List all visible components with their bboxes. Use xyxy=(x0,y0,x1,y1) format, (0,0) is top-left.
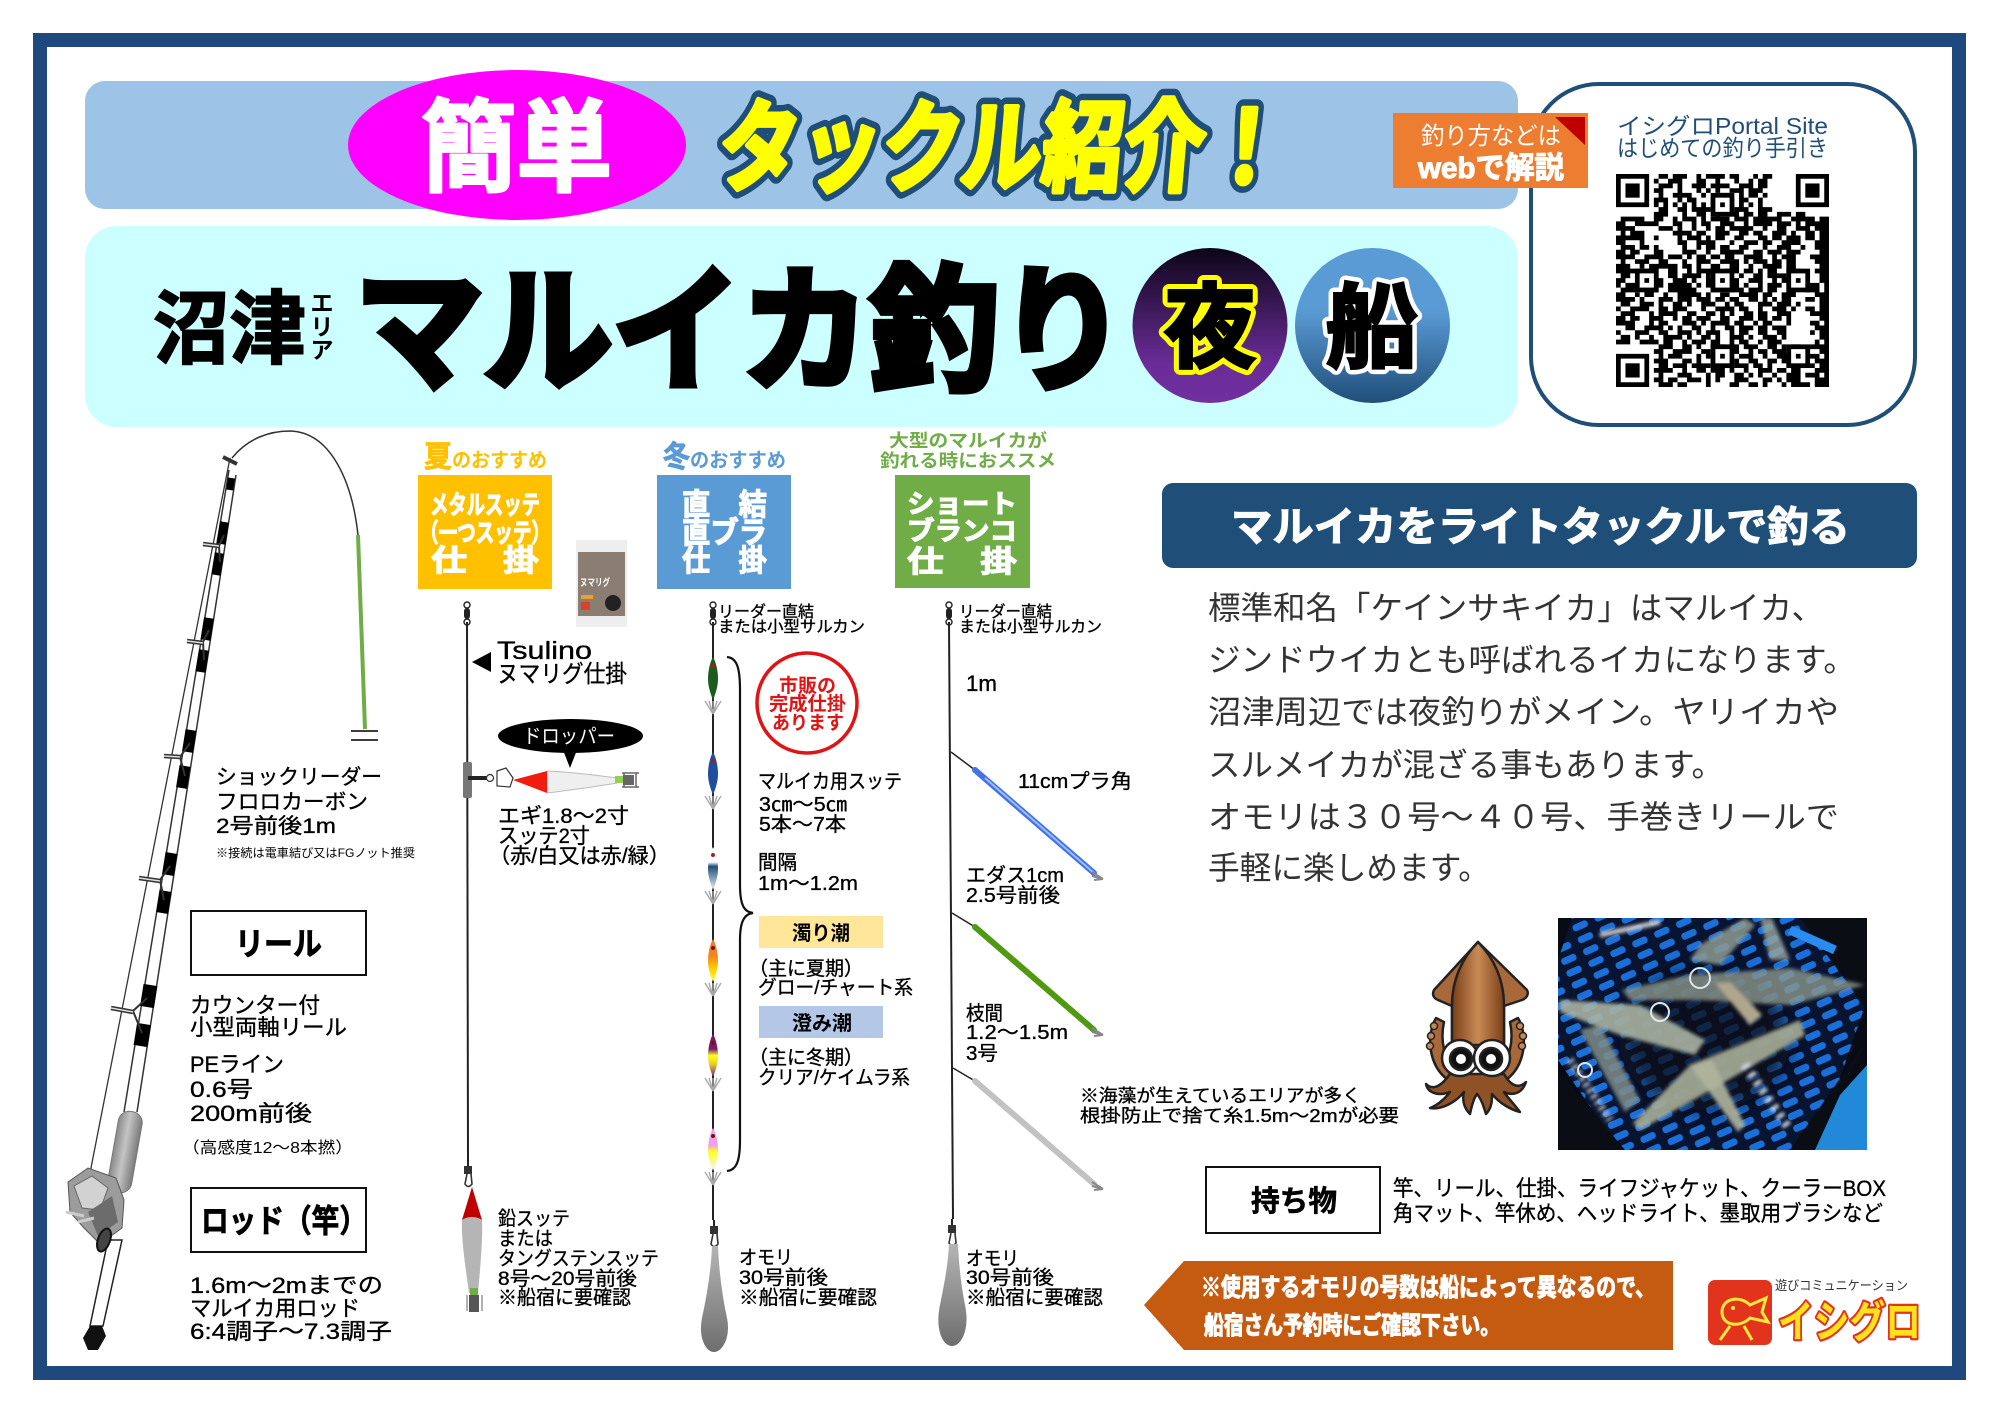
short branch rig title box: ブランコ xyxy=(907,516,1017,546)
swivel note: または小型サルカン xyxy=(718,618,865,636)
winter rig title box: 仕 掛 xyxy=(682,545,767,578)
summer rig title box: メタルスッテ xyxy=(430,490,540,520)
sinker text: ※船宿に要確認 xyxy=(966,1287,1103,1309)
shock leader text: ※接続は電車結び又はFGノット推奨 xyxy=(216,845,415,860)
product name: Tsulino xyxy=(497,637,592,665)
QR caption xyxy=(1617,113,1828,161)
description text block: 沼津周辺では夜釣りがメイン。ヤリイカや xyxy=(1208,694,1839,730)
egi text xyxy=(489,805,670,868)
main line with swivel xyxy=(710,602,716,1220)
rod tip guide xyxy=(223,457,237,464)
area label vertical: リ xyxy=(310,314,334,340)
winter rig title box: 直 結 xyxy=(682,489,767,522)
brace xyxy=(727,657,753,1171)
description text block: スルメイカが混ざる事もあります。 xyxy=(1208,747,1724,783)
rod specs text xyxy=(190,1273,392,1344)
winter heading: のおすすめ xyxy=(690,449,786,472)
fins and mantle xyxy=(1433,942,1528,1050)
logo mark xyxy=(1708,1280,1772,1345)
reel specs text: カウンター付 xyxy=(190,993,320,1018)
winter heading xyxy=(663,441,786,474)
rod label xyxy=(191,1188,367,1252)
place name: 沼津 xyxy=(153,285,306,374)
arrow marker xyxy=(472,652,491,672)
product name: ヌマリグ仕掛 xyxy=(497,661,627,688)
dropper callout: ドロッパー xyxy=(523,726,615,748)
column: winter rig xyxy=(657,441,913,1352)
sutte specs text: 5本～7本 xyxy=(759,813,846,836)
right section heading xyxy=(1162,483,1917,568)
right section heading: マルイカをライトタックルで釣る xyxy=(1231,504,1850,550)
reel specs text: 小型両軸リール xyxy=(190,1015,347,1040)
dark rim xyxy=(1598,920,1867,1150)
branch specs text: 2.5号前後 xyxy=(966,884,1060,907)
reel specs text: （高感度12～8本撚） xyxy=(182,1139,353,1157)
winter rig title box xyxy=(657,475,791,589)
heading: tackle introduction: タックル紹介！ xyxy=(714,93,1292,205)
short branch rig title box: ショート xyxy=(907,489,1017,519)
summer heading xyxy=(424,441,547,474)
arrow callout: sinker size note xyxy=(1144,1261,1673,1350)
short branch rig title box: 仕 掛 xyxy=(907,546,1017,579)
reel specs text: 200m前後 xyxy=(190,1101,312,1126)
plastic squid jig: green xyxy=(952,913,1103,1036)
company name: イシグロ xyxy=(1778,1298,1921,1347)
sutte jig: white xyxy=(705,847,721,904)
area label vertical: ア xyxy=(310,337,334,363)
summer heading: 夏 xyxy=(424,441,452,474)
sinker text: オモリ xyxy=(966,1248,1019,1270)
dark centre shadow xyxy=(1620,970,1790,1110)
reel label xyxy=(191,911,366,975)
branch interval text: 1.2～1.5m xyxy=(966,1022,1068,1044)
stamp: ready-made rigs available: 市販の xyxy=(779,675,836,697)
sutte specs text: 1m～1.2m xyxy=(758,873,858,895)
reel label: リール xyxy=(235,926,322,962)
swivel note xyxy=(959,603,1102,636)
arrow callout: sinker size note: ※使用するオモリの号数は船によって異なるので、 xyxy=(1201,1274,1655,1302)
badge: easy: 簡単 xyxy=(421,93,612,205)
egi text: （赤/白又は赤/緑） xyxy=(489,845,670,868)
lead sutte text xyxy=(498,1208,659,1309)
stamp: ready-made rigs available xyxy=(757,653,857,753)
muddy tide text xyxy=(749,958,913,999)
egi squid jig xyxy=(463,762,639,798)
description text block: 手軽に楽しめます。 xyxy=(1208,850,1490,886)
branch interval text: 3号 xyxy=(966,1043,998,1065)
reel specs text: 0.6号 xyxy=(190,1077,253,1102)
sutte specs text: 間隔 xyxy=(758,851,797,874)
arrow callout: sinker size note: 船宿さん予約時にご確認下さい。 xyxy=(1204,1311,1500,1340)
label: items to bring xyxy=(1206,1167,1380,1233)
sutte specs text: 3㎝～5㎝ xyxy=(759,794,847,816)
winter heading: 冬 xyxy=(663,441,690,474)
main title: マルイカ釣り xyxy=(355,256,1127,408)
main line with swivel xyxy=(946,602,953,1219)
badge: night: 夜 xyxy=(1164,278,1256,380)
shock leader text: ショックリーダー xyxy=(216,766,382,789)
swivel note: または小型サルカン xyxy=(959,618,1102,636)
summer heading: のおすすめ xyxy=(452,449,547,472)
lead sutte text: ※船宿に要確認 xyxy=(498,1287,631,1309)
logo: Ishiguro xyxy=(1708,1278,1921,1347)
company tagline: 遊びコミュニケーション xyxy=(1775,1278,1908,1293)
area label vertical: エ xyxy=(310,290,334,316)
badge: night xyxy=(1132,248,1288,403)
sinker xyxy=(938,1219,967,1346)
knot xyxy=(351,731,378,740)
QR panel xyxy=(1531,84,1915,425)
summer rig title box: （一つスッテ） xyxy=(420,518,550,548)
sutte jig: pink xyxy=(705,1128,721,1185)
lead sutte xyxy=(462,1160,482,1312)
label: clear tide: 澄み潮 xyxy=(792,1012,852,1035)
rod specs text: 6:4調子～7.3調子 xyxy=(190,1319,392,1344)
label: clear tide xyxy=(759,1006,883,1038)
sutte jig: orange xyxy=(705,939,721,996)
shock leader text: 2号前後1m xyxy=(216,815,336,838)
plastic squid jig: gray xyxy=(953,1068,1103,1190)
rod blank xyxy=(124,470,236,1112)
sutte specs text xyxy=(758,771,902,895)
column: summer rig xyxy=(418,441,670,1312)
swivel note: リーダー直結 xyxy=(959,603,1052,621)
plastic squid jig: blue xyxy=(951,752,1103,880)
photo: caught squid in basket xyxy=(1558,918,1867,1150)
seaweed note xyxy=(1080,1086,1399,1126)
label: items to bring: 持ち物 xyxy=(1251,1185,1337,1218)
muddy tide text: （主に夏期） xyxy=(749,958,863,980)
badge: night: 夜 xyxy=(1164,278,1256,380)
badge: easy xyxy=(348,70,686,220)
description text block: 標準和名「ケインサキイカ」はマルイカ、 xyxy=(1208,590,1824,626)
sinker text: 30号前後 xyxy=(966,1267,1054,1289)
big squid heading: 釣れる時におススメ xyxy=(880,450,1056,471)
branch specs text xyxy=(966,864,1064,907)
badge: boat: 船 xyxy=(1326,278,1418,380)
items text: 竿、リール、仕掛、ライフジャケット、クーラーBOX xyxy=(1393,1176,1886,1201)
clear tide text xyxy=(749,1047,910,1089)
title panel: Numazu area maruika fishing xyxy=(85,226,1518,427)
seaweed note: ※海藻が生えているエリアが多く xyxy=(1080,1086,1361,1106)
description text block: ジンドウイカとも呼ばれるイカになります。 xyxy=(1208,642,1856,678)
sinker text: ※船宿に要確認 xyxy=(739,1287,877,1309)
swivel note: リーダー直結 xyxy=(718,603,814,621)
branch interval text: 枝間 xyxy=(966,1002,1003,1025)
lead sutte text: または xyxy=(498,1228,553,1250)
rod label: ロッド（竿） xyxy=(201,1203,367,1239)
sinker xyxy=(701,1220,728,1352)
main line with swivel xyxy=(464,602,470,1160)
egi text: エギ1.8～2寸 xyxy=(498,805,629,828)
shock leader text: フロロカーボン xyxy=(216,791,368,814)
lead sutte text: 8号～20号前後 xyxy=(498,1268,637,1290)
clear tide text: クリア/ケイムラ系 xyxy=(758,1067,910,1089)
branch interval text xyxy=(966,1002,1068,1065)
sutte specs text: マルイカ用スッテ xyxy=(758,771,902,793)
title banner: tackle introduction xyxy=(85,70,1518,220)
web explanation tag: 釣り方などは xyxy=(1421,123,1561,150)
short branch rig title box xyxy=(895,475,1030,588)
web explanation tag xyxy=(1393,113,1588,188)
big squid heading xyxy=(880,430,1056,471)
items text xyxy=(1393,1176,1886,1226)
label: muddy tide: 濁り潮 xyxy=(792,922,850,945)
icon: squid mascot xyxy=(1426,942,1528,1114)
description text block: オモリは３０号～４０号、手巻きリールで xyxy=(1208,799,1839,835)
red corner marker xyxy=(1555,117,1585,145)
banner background xyxy=(85,81,1518,209)
reel specs text xyxy=(182,993,353,1157)
jig size label: 11cmプラ角 xyxy=(1018,770,1132,793)
winter rig title box: 直ブラ xyxy=(682,516,767,550)
summer rig title box: 仕 掛 xyxy=(431,545,539,578)
side arms xyxy=(1430,1018,1524,1080)
column: short branch rig xyxy=(880,430,1399,1346)
heading: tackle introduction: タックル紹介！ xyxy=(714,93,1292,205)
sinker text xyxy=(739,1247,877,1309)
lead sutte text: タングステンスッテ xyxy=(498,1248,659,1270)
stamp: ready-made rigs available: あります xyxy=(772,712,844,734)
branch specs text: エダス1cm xyxy=(966,864,1064,887)
basket mesh xyxy=(1558,918,1867,1150)
line guides xyxy=(111,535,224,1033)
swivel note xyxy=(718,603,865,636)
squid bodies xyxy=(1560,918,1865,1132)
stamp: ready-made rigs available: 完成仕掛 xyxy=(769,692,846,715)
QR caption: イシグロPortal Site xyxy=(1617,113,1828,139)
badge: boat xyxy=(1295,248,1450,403)
reel xyxy=(66,1168,124,1253)
rod grip xyxy=(106,1110,144,1194)
rod specs text: 1.6m～2mまでの xyxy=(190,1273,383,1298)
handle below reel xyxy=(90,1240,122,1326)
items text: 角マット、竿休め、ヘッドライト、墨取用ブラシなど xyxy=(1393,1201,1883,1226)
length label: 1m xyxy=(966,671,997,696)
dropper callout xyxy=(498,719,643,768)
big squid heading: 大型のマルイカが xyxy=(889,430,1047,451)
sutte jig: green xyxy=(705,657,721,714)
product package: ヌマリグ xyxy=(580,576,610,589)
main line arc and shock leader line xyxy=(232,431,358,535)
rod butt xyxy=(83,1326,106,1350)
bubbles xyxy=(1578,968,1710,1077)
sutte jig: purple xyxy=(705,1034,721,1091)
QR code xyxy=(1614,172,1831,389)
sutte jig: blue xyxy=(705,752,721,809)
lower arms xyxy=(1426,1074,1526,1114)
muddy tide text: グロー/チャート系 xyxy=(758,977,913,999)
egi text: スッテ2寸 xyxy=(498,825,590,848)
sinker text: 30号前後 xyxy=(739,1267,828,1289)
panel background xyxy=(85,226,1518,427)
product name xyxy=(497,637,627,688)
rod specs text: マルイカ用ロッド xyxy=(190,1296,360,1321)
badge: boat: 船 xyxy=(1326,278,1418,380)
sinker text xyxy=(966,1248,1103,1309)
fishing line along rod xyxy=(90,458,230,1173)
shock leader text xyxy=(216,766,415,860)
sinker text: オモリ xyxy=(739,1247,793,1269)
green shock leader xyxy=(358,535,365,729)
summer rig title box xyxy=(418,475,552,589)
label: muddy tide xyxy=(759,916,883,948)
reel specs text: PEライン xyxy=(190,1052,284,1077)
area label vertical xyxy=(310,290,334,363)
clear tide text: （主に冬期） xyxy=(749,1047,863,1069)
product package xyxy=(576,540,627,627)
suckers xyxy=(1426,1022,1526,1050)
web explanation tag: webで解説 xyxy=(1417,152,1564,185)
description text block xyxy=(1208,590,1856,886)
panel outline xyxy=(1531,84,1915,425)
seaweed note: 根掛防止で捨て糸1.5m～2mが必要 xyxy=(1080,1106,1399,1126)
lead sutte text: 鉛スッテ xyxy=(498,1208,570,1230)
QR caption: はじめての釣り手引き xyxy=(1617,135,1828,161)
eyes xyxy=(1442,1040,1478,1076)
thread wraps xyxy=(140,478,232,1046)
fishing rod illustration xyxy=(66,431,378,1350)
